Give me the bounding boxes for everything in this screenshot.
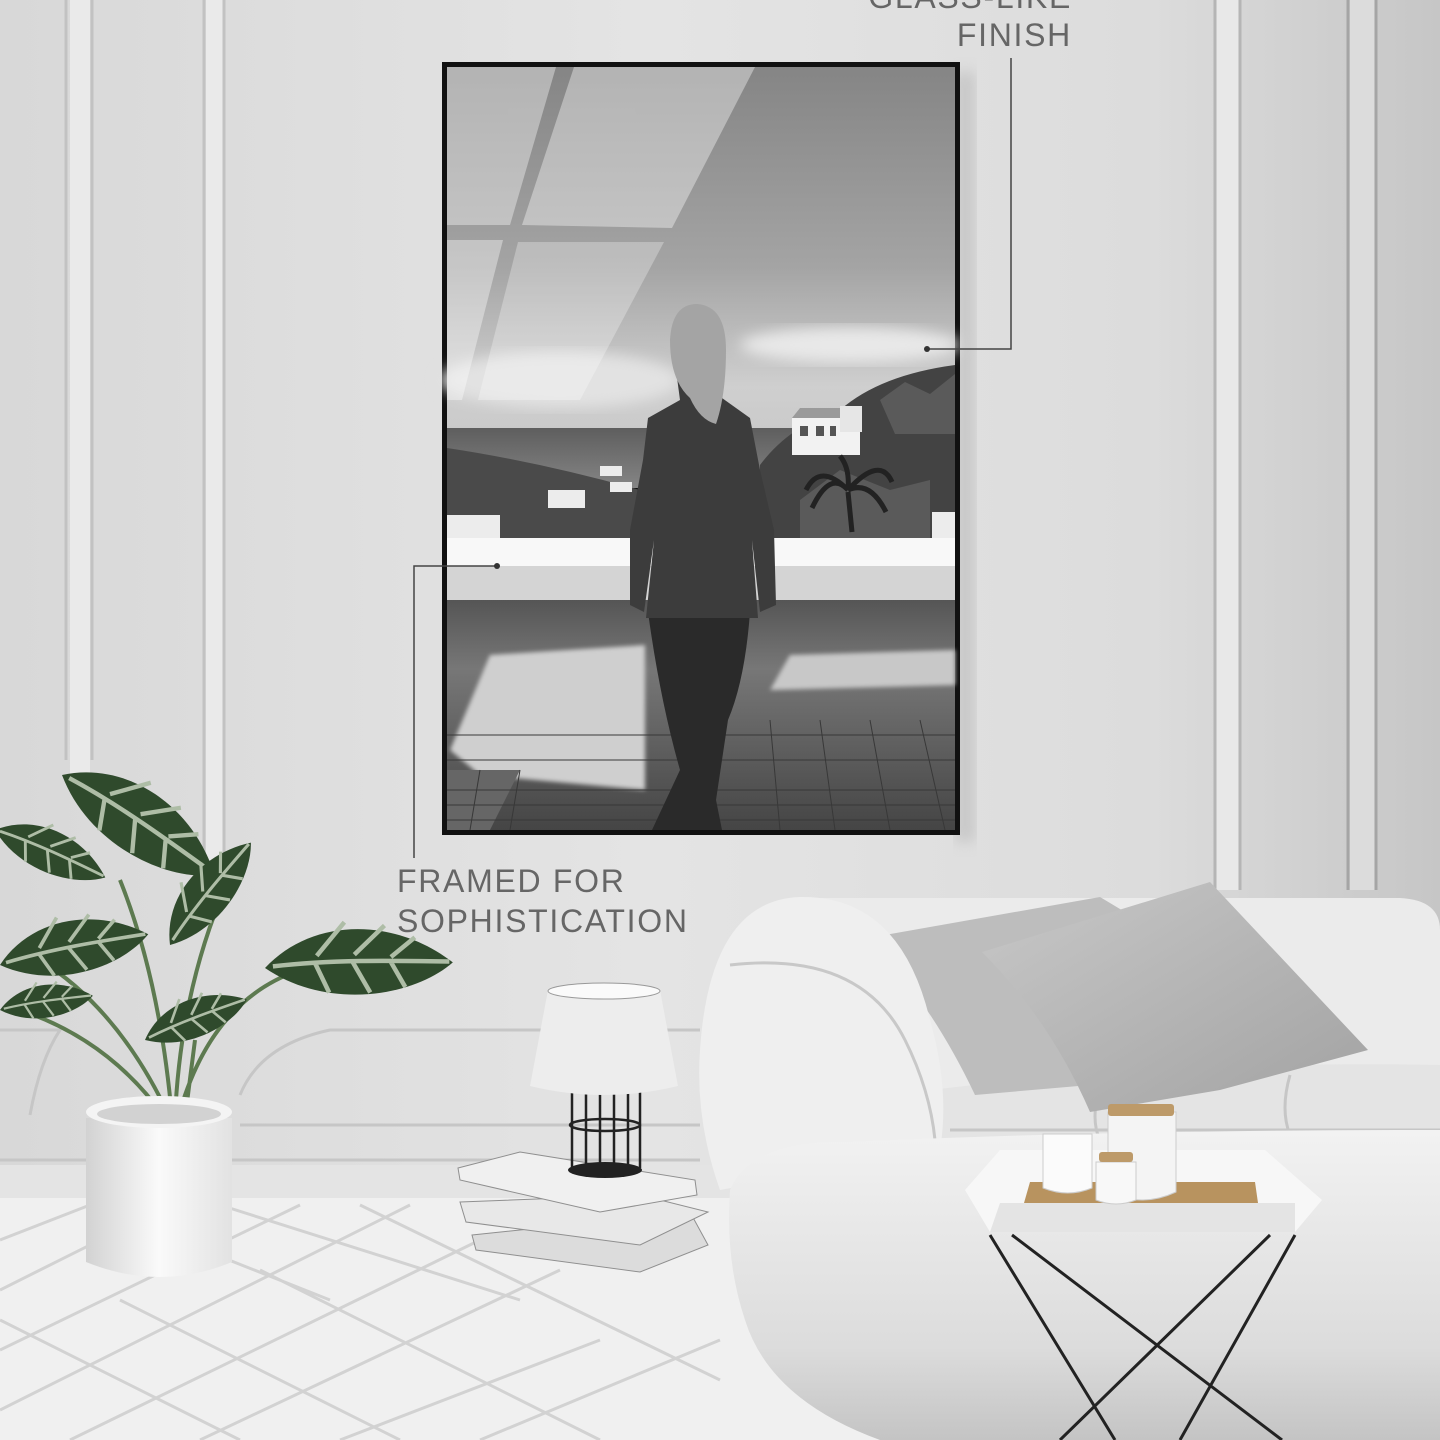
side table with tray: [965, 1104, 1322, 1440]
white mug: [1043, 1134, 1092, 1193]
sea: [447, 428, 955, 488]
black frame: [442, 62, 960, 835]
grey pillow back: [868, 897, 1130, 1095]
books: [458, 1152, 708, 1272]
villa: [792, 406, 862, 455]
lamp shade: [530, 985, 678, 1095]
table lamp and books: [458, 983, 708, 1272]
figure silhouette: [630, 305, 776, 618]
callout: framed for sophistication: [397, 563, 689, 939]
leader line: [414, 566, 497, 858]
large jar: [1108, 1104, 1176, 1200]
sofa back: [800, 898, 1440, 1120]
left arm: [699, 897, 943, 1190]
leader line: [927, 58, 1011, 349]
pool water: [447, 600, 955, 830]
clouds: [740, 327, 960, 363]
seat: [930, 1064, 1440, 1240]
callout: glass-like finish: FINISH: [957, 17, 1072, 53]
pool deck: [447, 512, 955, 540]
floor: [0, 1165, 1440, 1440]
plant: [0, 730, 458, 1118]
stems: [20, 880, 300, 1118]
small houses: [548, 466, 632, 508]
callout: glass-like finish: [868, 0, 1072, 352]
lamp base: [572, 1092, 640, 1172]
glass reflection: [447, 67, 755, 400]
hills: [447, 448, 640, 540]
wood board: [1024, 1182, 1258, 1203]
sofa front: [729, 1130, 1440, 1440]
figure reflection: [648, 612, 750, 830]
frame shadow: [955, 72, 975, 842]
callout label: FRAMED FOR: [397, 863, 626, 899]
sofa: [699, 882, 1440, 1440]
hair: [670, 304, 726, 424]
leaves: [56, 730, 228, 914]
wall moldings: [0, 0, 1376, 1160]
palm: [806, 456, 892, 532]
small jar: [1096, 1152, 1136, 1204]
sky: [447, 67, 955, 467]
tray: [965, 1150, 1322, 1232]
framed artwork: [440, 62, 975, 842]
grey pillow front: [982, 882, 1368, 1112]
table legs: [990, 1235, 1295, 1440]
callout: framed for sophistication: SOPHISTICATION: [397, 903, 689, 939]
plant pot: [86, 1096, 232, 1277]
